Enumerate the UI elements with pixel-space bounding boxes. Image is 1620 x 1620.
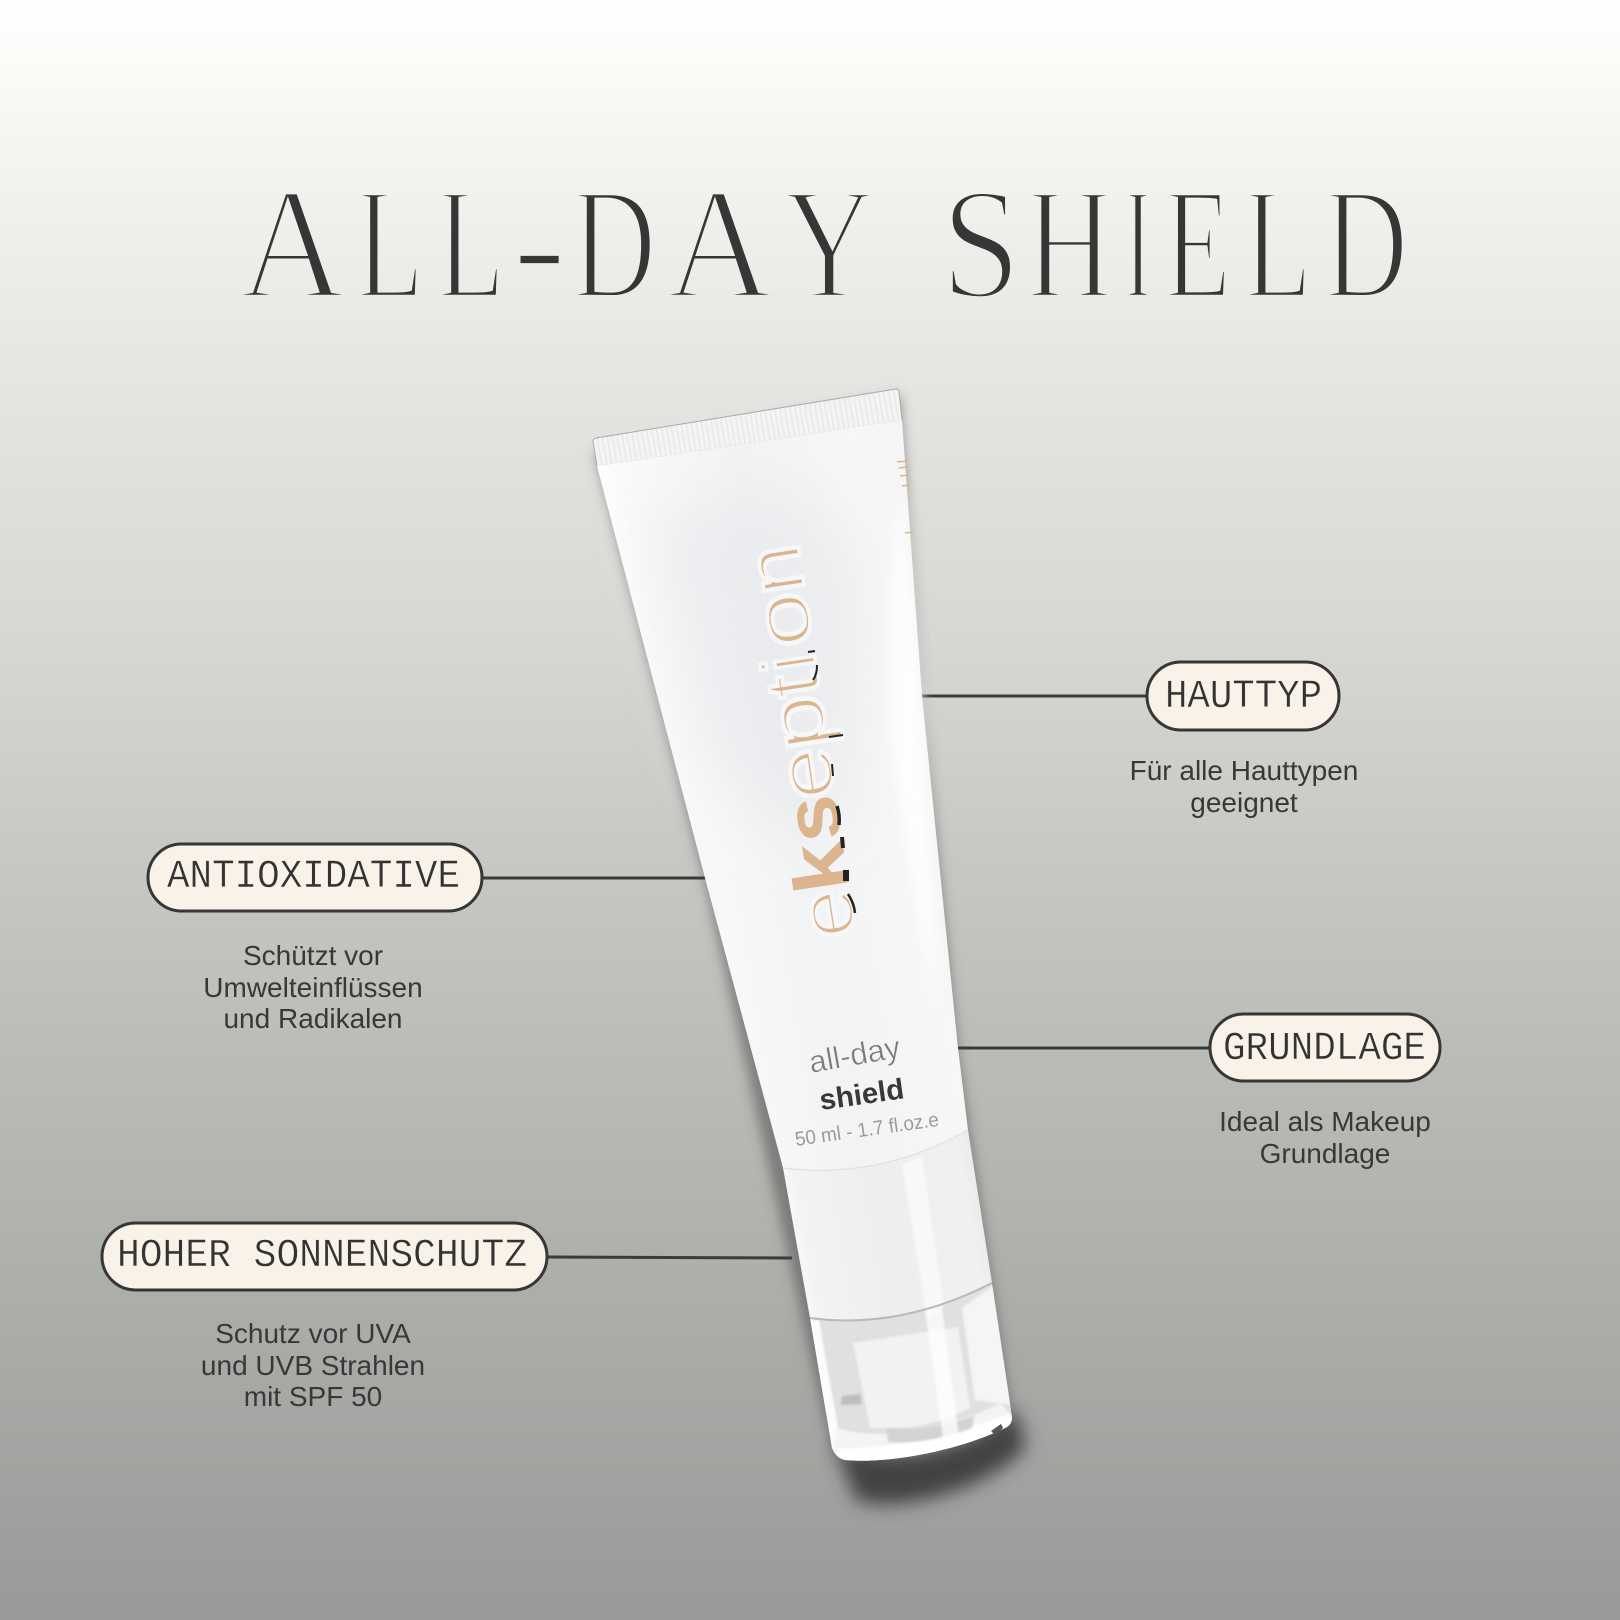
description: Hoher Sonnenschutz: Schutz vor UVA	[215, 1318, 411, 1349]
cap right sheen	[962, 1285, 1012, 1405]
connector: Hauttyp	[920, 694, 1146, 698]
description: Grundlage: Grundlage	[1260, 1138, 1390, 1169]
brand wordmark: o	[736, 586, 830, 654]
product tube	[593, 389, 1026, 1504]
base rim	[836, 1416, 1012, 1461]
description: Antioxidative: Umwelteinflüssen	[203, 972, 423, 1003]
dark cap spot	[991, 1424, 1003, 1435]
clear cap	[808, 1283, 1016, 1470]
pill: Hauttyp: HAUTTYP	[1165, 675, 1322, 720]
crimp	[593, 389, 902, 466]
cap join line	[810, 1283, 992, 1320]
inner bar	[841, 1394, 862, 1405]
product name: shield: shield	[818, 1073, 906, 1117]
base shade	[886, 1416, 974, 1442]
description: Grundlage: Ideal als Makeup	[1219, 1106, 1431, 1137]
pill: Hauttyp	[1147, 662, 1339, 730]
product name: all-day: all-day	[806, 1029, 903, 1080]
title: H	[1026, 156, 1113, 332]
callout: Antioxidative	[148, 844, 482, 1034]
title: A	[239, 156, 346, 332]
title: L	[437, 156, 505, 332]
title: D	[572, 156, 656, 332]
brand wordmark: t	[749, 667, 837, 704]
tube side print	[897, 461, 913, 533]
cap highlight strip	[925, 1309, 959, 1450]
title: -	[512, 156, 567, 332]
callout: Hauttyp	[1130, 662, 1358, 818]
description: Antioxidative: Schützt vor	[243, 940, 383, 971]
title: A	[666, 156, 773, 332]
pill: Hoher Sonnenschutz	[102, 1223, 547, 1290]
title: Y	[783, 156, 875, 332]
crimp top edge	[593, 389, 902, 466]
description: Hauttyp: geeignet	[1190, 787, 1298, 818]
title: L	[1244, 156, 1312, 332]
description: Hoher Sonnenschutz: und UVB Strahlen	[201, 1350, 425, 1381]
description: Antioxidative: und Radikalen	[223, 1003, 403, 1034]
brand wordmark: s	[767, 790, 859, 848]
pill: Grundlage: GRUNDLAGE	[1223, 1027, 1426, 1072]
connector: Antioxidative	[483, 876, 708, 880]
pill: Hoher Sonnenschutz: HOHER SONNENSCHUTZ	[117, 1234, 527, 1279]
brand wordmark: e	[760, 742, 853, 807]
vertical highlight	[902, 1156, 944, 1317]
band line	[783, 1130, 968, 1170]
brand wordmark: p	[752, 689, 845, 757]
pill: Antioxidative: ANTIOXIDATIVE	[167, 855, 460, 900]
cap left sheen	[810, 1319, 838, 1450]
cap inner cylinder	[853, 1327, 970, 1429]
pill: Antioxidative	[148, 844, 482, 911]
connector: Hoher Sonnenschutz	[548, 1257, 792, 1258]
wordmark dark accents	[808, 651, 855, 913]
body soft shading	[650, 480, 860, 840]
description: Hoher Sonnenschutz: mit SPF 50	[244, 1381, 382, 1412]
cap base	[833, 1404, 1012, 1461]
brand wordmark: i	[746, 649, 833, 677]
description: Hauttyp: Für alle Hauttypen	[1130, 755, 1358, 786]
tube body	[597, 420, 968, 1170]
title: D	[1324, 156, 1408, 332]
callout: Hoher Sonnenschutz	[102, 1223, 547, 1412]
callout: Grundlage	[1210, 1014, 1440, 1169]
title: S	[941, 156, 1021, 332]
tube shadow	[595, 395, 1026, 1504]
title: I	[1124, 156, 1152, 332]
lower tube section	[783, 1130, 992, 1320]
brand wordmark: e	[781, 883, 873, 945]
product size: 50 ml - 1.7 fl.oz.e	[794, 1109, 940, 1151]
connector: Grundlage	[955, 1046, 1210, 1050]
title: L	[356, 156, 424, 332]
title: E	[1164, 156, 1231, 332]
right fold highlight	[889, 480, 935, 1020]
brand wordmark: n	[729, 539, 822, 601]
brand wordmark: k	[774, 836, 866, 899]
brand wordmark	[729, 539, 873, 945]
pill: Grundlage	[1210, 1014, 1440, 1081]
